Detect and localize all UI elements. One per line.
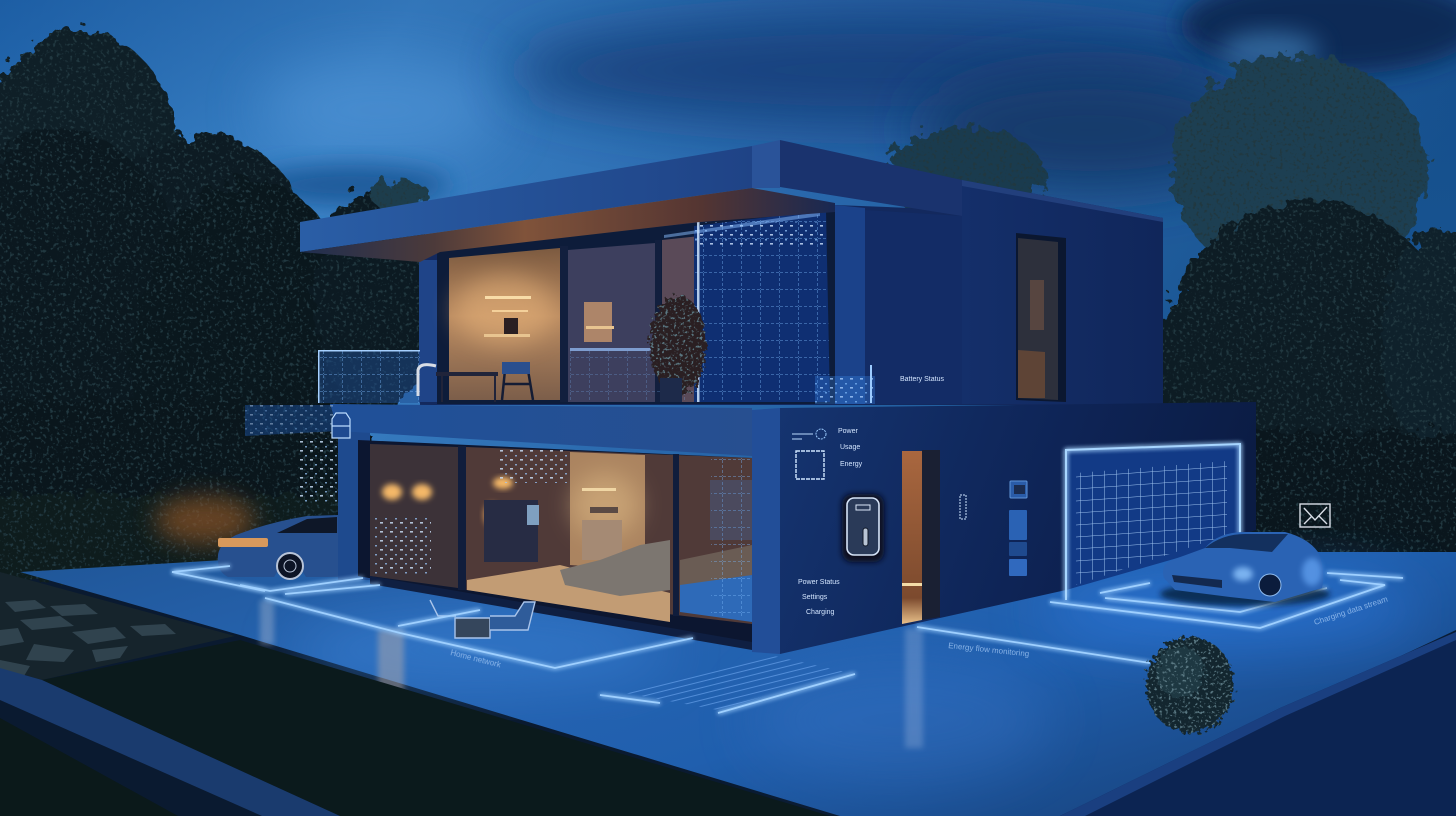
right holographic car <box>1160 532 1330 606</box>
wall data labels: Power Status <box>798 579 840 586</box>
floor data text: Energy flow monitoring <box>948 641 1030 658</box>
left car <box>218 515 338 579</box>
wall charger <box>842 494 884 562</box>
sky with dusk clouds <box>0 0 1456 560</box>
lawn and curb <box>0 640 830 816</box>
tree behind the roof <box>885 127 1045 223</box>
floor data text: Home network <box>450 648 503 670</box>
floor data text: Charging data stream <box>1313 594 1389 627</box>
house: ground floor walls <box>245 402 1256 654</box>
upper glazing <box>437 208 875 404</box>
shrub <box>1146 637 1234 733</box>
raised right edge <box>1060 632 1456 816</box>
ground floor glazing and interior <box>358 440 752 650</box>
balcony hologram railing and furniture <box>318 350 533 403</box>
wall data labels: Energy <box>840 461 863 468</box>
wall control panels <box>1009 481 1027 576</box>
floor neon lines <box>172 566 1403 713</box>
envelope sign <box>1300 504 1330 527</box>
house: roof <box>300 140 1163 262</box>
wall data labels: Usage <box>840 444 860 451</box>
door <box>902 450 940 624</box>
patio furniture <box>430 600 535 638</box>
hedge left <box>0 495 340 580</box>
wall data labels: Power <box>838 428 859 435</box>
wall data labels <box>792 376 966 616</box>
house: upper storey <box>419 180 1163 405</box>
stone path <box>0 572 235 680</box>
wall data labels: Charging <box>806 609 835 616</box>
garage hologram <box>1066 444 1240 600</box>
trees: left group <box>0 30 437 580</box>
hatched floor zone <box>620 655 845 710</box>
trees: right group <box>1155 55 1456 570</box>
wall data labels: Battery Status <box>900 376 944 383</box>
neon balcony edge line <box>245 403 835 405</box>
floor data text <box>450 594 1389 670</box>
ground: patio <box>20 552 1456 816</box>
wall data labels: Settings <box>802 594 828 601</box>
